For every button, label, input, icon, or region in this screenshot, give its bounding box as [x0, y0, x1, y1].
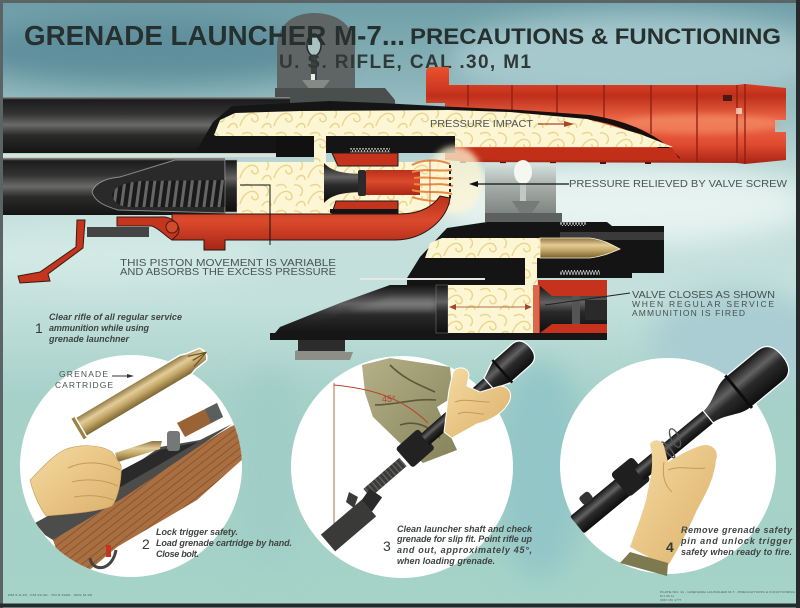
hand — [30, 446, 121, 516]
step 2 text: Close bolt. — [156, 549, 199, 559]
upper gas chamber with swirling gas — [214, 110, 673, 162]
upper valve block — [332, 148, 398, 166]
cartridge label: GRENADE — [59, 369, 108, 379]
footnote right — [660, 590, 796, 602]
step 2 text — [142, 527, 292, 559]
label: piston movement: THIS PISTON MOVEMENT IS VARIABLE — [120, 258, 336, 269]
arrow: pressure impact — [538, 121, 574, 127]
step 2 text: Load grenade cartridge by hand. — [156, 538, 292, 548]
red interior wall under chamber — [455, 148, 680, 160]
step 3 text: Clean launcher shaft and check — [397, 524, 533, 534]
bullet — [540, 238, 620, 258]
grenade launcher — [564, 340, 796, 541]
panel: step 3 circle — [291, 336, 540, 578]
label: valve closes — [632, 290, 775, 318]
grenade cartridge — [71, 342, 213, 439]
step 4 text: 4 — [666, 539, 674, 555]
panel: step 2 loading circle — [20, 355, 245, 578]
recoil spring — [112, 180, 225, 207]
step 4 text — [666, 525, 793, 557]
title: GRENADE LAUNCHER M-7... — [24, 20, 405, 51]
footnote right: PLATE NO. 11 - GRENADE LAUNCHER M-7 - PRECAUTIONS & FUNCTIONING — [660, 590, 796, 594]
cartridge label: CARTRIDGE — [55, 380, 113, 390]
label: valve closes: WHEN REGULAR SERVICE — [632, 299, 774, 309]
step 3 text: grenade for slip fit. Point rifle up — [396, 534, 532, 544]
closed valve — [533, 270, 607, 333]
lower receiver tube — [0, 158, 225, 215]
launcher on rifle muzzle — [328, 462, 403, 543]
label: pressure impact: PRESSURE IMPACT — [430, 119, 533, 130]
label: pressure relieved: PRESSURE RELIEVED BY VALVE SCREW — [569, 179, 788, 190]
ghost rear sight behind title — [275, 13, 395, 106]
lower rifle cutaway — [270, 222, 664, 340]
45 degree arc — [334, 385, 428, 423]
grey piston cap — [225, 160, 237, 212]
lower chamber gas: piston side — [448, 285, 533, 333]
leader: valve — [545, 293, 630, 305]
step 2 text: 2 — [142, 536, 150, 552]
rifle foot — [295, 340, 353, 360]
cartridge in chamber — [115, 441, 162, 462]
safety pin ring — [667, 427, 683, 449]
title: PRECAUTIONS & FUNCTIONING — [410, 24, 781, 49]
subtitle: U. S. RIFLE, CAL .30, M1 — [279, 52, 531, 73]
label: piston movement: AND ABSORBS THE EXCESS PRESSURE — [120, 267, 336, 278]
upper rifle barrel — [0, 97, 680, 160]
step 1 text: ammunition while using — [49, 323, 150, 333]
step 1 text: Clear rifle of all regular service — [49, 312, 182, 322]
step 3 text — [383, 524, 533, 566]
rifle stock and receiver — [35, 403, 245, 578]
step 1 text: grenade launchner — [48, 334, 129, 344]
step 4 text: Remove grenade safety — [681, 525, 793, 535]
footnote right: M-1 OF 11 — [660, 594, 674, 598]
title — [24, 20, 781, 51]
vertical reference line — [333, 383, 335, 527]
lower gas chamber — [237, 162, 450, 214]
45 degree arc: 45° — [382, 394, 396, 404]
step 1 text: 1 — [35, 320, 43, 336]
trigger group — [18, 217, 179, 283]
lower figure rear sight — [485, 160, 562, 222]
step 4 text: safety when ready to fire. — [681, 547, 792, 557]
piston travel arrow — [449, 304, 532, 310]
grenade cross-section (red) — [426, 67, 786, 164]
panel: step 4 circle — [560, 340, 796, 576]
step 3 text: when loading grenade. — [397, 556, 495, 566]
piston leader line — [240, 185, 270, 245]
lower chamber gas: top — [425, 238, 545, 285]
cartridge label — [55, 369, 134, 390]
pressure flames — [412, 146, 483, 214]
step 3 text: and out, approximately 45°, — [397, 545, 532, 555]
hand gripping grenade — [444, 368, 511, 438]
label: valve closes: AMMUNITION IS FIRED — [632, 308, 745, 318]
valve piston — [324, 163, 420, 203]
grenade on launcher — [394, 336, 540, 470]
step 2 text: Lock trigger safety. — [156, 527, 238, 537]
footnote left: RM 5-9-45 - FM 23-30 - TM 9-1900 - SML M-39 — [8, 593, 92, 597]
sleeve cuff — [620, 552, 668, 576]
step 4 text: pin and unlock trigger — [680, 536, 792, 546]
lower valve block — [330, 201, 398, 213]
footnote right: ORD. NO. 1777 — [660, 598, 682, 602]
black body over chamber — [326, 136, 455, 153]
step 3 text: 3 — [383, 538, 391, 554]
red gas cylinder — [172, 196, 450, 250]
arrow: pressure relieved — [469, 181, 569, 187]
sleeve — [362, 358, 457, 463]
hand holding pin — [630, 440, 717, 567]
label: piston movement — [120, 258, 336, 278]
step 1 text — [35, 312, 182, 344]
label: valve closes: VALVE CLOSES AS SHOWN — [632, 290, 775, 301]
